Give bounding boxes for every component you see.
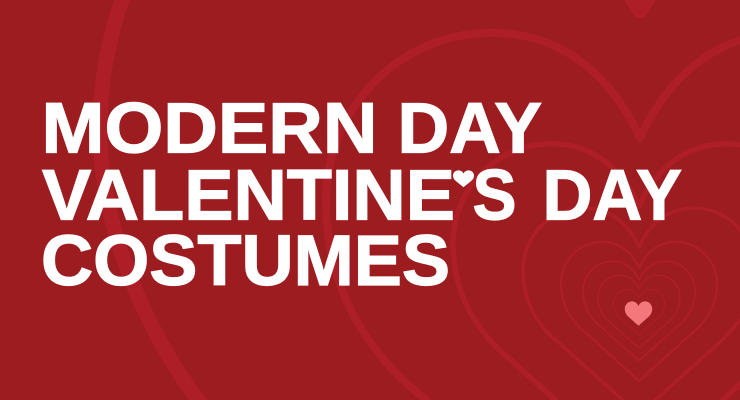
heart outline: innermost: [614, 289, 664, 335]
title line 1: second word: DAY: [398, 90, 542, 168]
icon: solid pink heart: [625, 301, 652, 326]
heart outline: second: [326, 33, 739, 400]
heart outline: fourth: [523, 208, 740, 400]
heart outline: fifth: [561, 242, 717, 381]
title line 2: first word: VALENTINE: [42, 156, 455, 236]
heart outline: largest: [100, 0, 647, 400]
title: [41, 90, 682, 301]
heart outline: seventh: [598, 275, 680, 348]
title line 2: possessive S: S: [472, 156, 516, 236]
title line 3: COSTUMES: [41, 222, 450, 301]
title line 2: last word: DAY: [542, 156, 682, 236]
heart outline: sixth: [583, 261, 695, 361]
icon: heart apostrophe: [453, 170, 474, 187]
title line 1: first word: MODERN: [42, 90, 378, 168]
heart outline: third: [453, 144, 740, 400]
